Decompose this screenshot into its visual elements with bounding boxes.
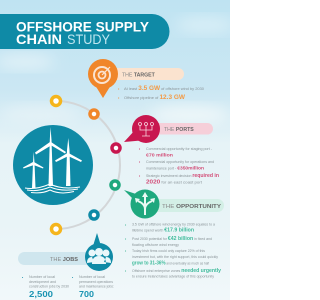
target bullets: • [118, 96, 120, 100]
opportunity bullets: floating offshore wind energy [132, 243, 179, 247]
icon: people [85, 233, 113, 271]
timeline arc with dots [52, 96, 120, 234]
target bullets: At least 3.5 GW of offshore wind by 2030 [124, 86, 204, 92]
panel: the target [88, 59, 204, 101]
icon: port network [124, 115, 160, 143]
title banner: OFFSHORE SUPPLY [16, 20, 149, 34]
icon: target [88, 59, 118, 98]
jobs column: local development: 2,500 [29, 289, 53, 299]
jobs column: permanent: permanent operations [79, 280, 113, 284]
opportunity bullets: Post 2030 potential for €42 billion in fixed and [132, 236, 212, 242]
opportunity bullets: • [125, 249, 127, 253]
jobs column: local development: Number of local [29, 275, 55, 279]
target bullets: • [118, 87, 120, 91]
panel: the opportunity [124, 190, 224, 278]
opportunity bullets: • [125, 269, 127, 273]
opportunity bullets: Offshore wind enterprise zones needed urgently [132, 268, 221, 274]
ports bullets [139, 147, 219, 186]
panel: wind turbines [13, 125, 93, 205]
ports bullets: €70 million [146, 152, 173, 158]
jobs column: local development [22, 275, 69, 299]
opportunity bullets: grow to 31-36% and eventually as much as half [132, 260, 209, 266]
jobs column: permanent [72, 275, 114, 299]
jobs column: permanent: and maintenance jobs: [79, 284, 114, 288]
ports bullets: Commercial opportunity for staging port - [146, 147, 212, 151]
opportunity bullets [125, 222, 221, 278]
jobs column: local development: construction jobs by 2030 [29, 284, 69, 288]
ports bullets: maintenance port - €350million [146, 166, 204, 170]
jobs column: local development: development and [29, 280, 56, 284]
title banner: CHAIN [16, 32, 62, 47]
jobs column: permanent: Number of local [79, 275, 105, 279]
jobs column: local development: • [22, 276, 24, 280]
opportunity heading pill: THE OPPORTUNITY [162, 204, 221, 210]
jobs column: permanent: • [72, 276, 74, 280]
ports bullets: Strategic investment decision required in [146, 173, 219, 179]
title banner [0, 14, 170, 49]
opportunity bullets: Today Irish firms could only capture 22% of this [132, 249, 205, 253]
panel: the ports [124, 115, 219, 186]
opportunity bullets: 3.5 GW of offshore wind energy by 2030 equates to a [132, 222, 215, 226]
ports bullets: • [139, 174, 141, 178]
jobs heading pill: THE JOBS [50, 257, 78, 263]
opportunity bullets: lifetime spend worth €17.9 billion [132, 228, 194, 234]
ports bullets: Commercial opportunity for operations and [146, 160, 214, 164]
icon: diverging arrows [124, 190, 160, 218]
opportunity bullets: • [125, 237, 127, 241]
panel: the jobs [18, 233, 114, 299]
ports bullets: • [139, 147, 141, 151]
opportunity bullets: investment but, with the right support, this could quickly [132, 255, 218, 259]
jobs column: permanent: 700 [79, 289, 94, 299]
ports bullets: • [139, 160, 141, 164]
opportunity bullets: • [125, 223, 127, 227]
target bullets [118, 86, 204, 101]
target heading pill: THE TARGET [122, 72, 156, 78]
target bullets: Offshore pipeline of 12.3 GW [124, 95, 185, 101]
opportunity bullets: to ensure Ireland takes advantage of this opportunity [132, 274, 214, 278]
background sky [0, 0, 235, 300]
ports bullets: 2020 for an east coast port [146, 180, 202, 186]
title banner: STUDY [67, 32, 110, 47]
ports heading pill: THE PORTS [164, 127, 194, 133]
